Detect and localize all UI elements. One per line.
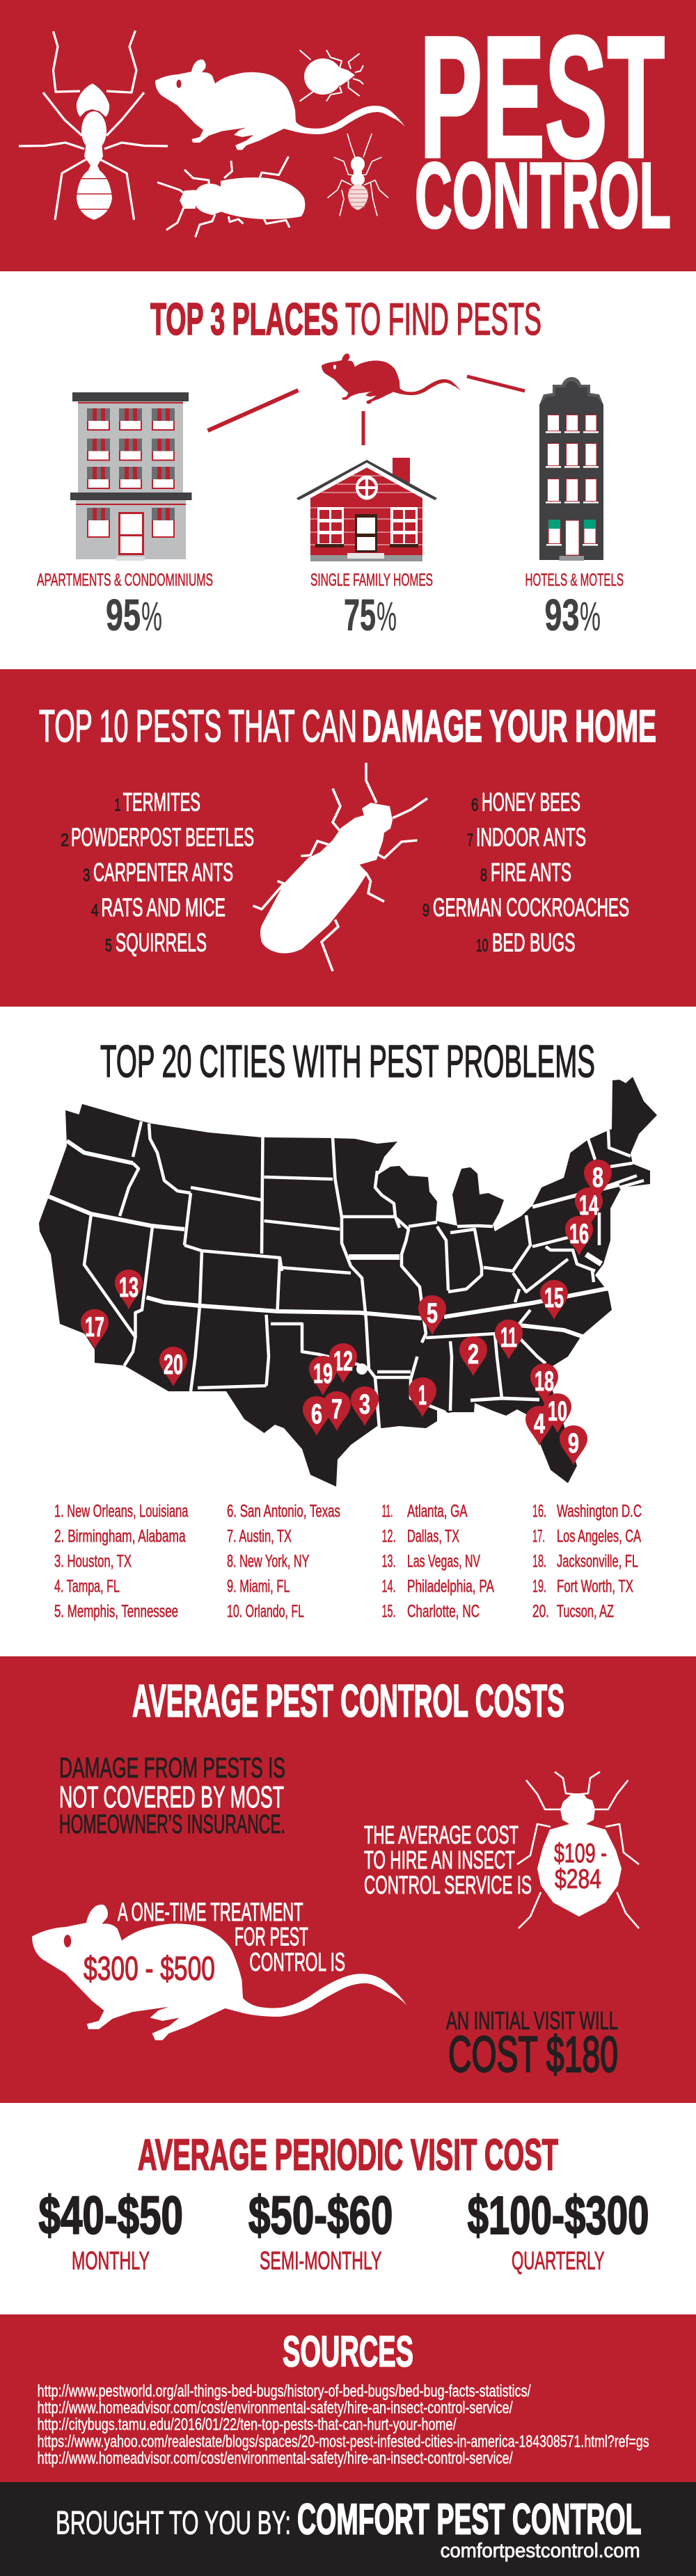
heading: top 3 places to find pests: TOP 3 PLACES	[150, 294, 338, 344]
callout: one-time treatment text: CONTROL IS	[249, 1948, 345, 1976]
list: pests 6 to 10: HONEY BEES	[482, 787, 580, 817]
city list: 9. Miami, FL	[227, 1577, 290, 1597]
city list: 14.	[381, 1577, 395, 1597]
list: pests 1 to 5: 4	[91, 901, 99, 920]
list: pests 6 to 10: 8	[480, 865, 487, 885]
list: pests 1 to 5: TERMITES	[123, 787, 200, 817]
pin 6	[303, 1396, 331, 1436]
city list: 10. Orlando, FL	[227, 1602, 304, 1622]
callout: average cost text	[364, 1821, 532, 1899]
stat: hotels and motels	[525, 570, 624, 640]
source links: http://www.pestworld.org/all-things-bed-bugs/history-of-bed-bugs/bed-bug-facts-statistics/	[38, 2382, 531, 2401]
callout: average cost text: THE AVERAGE COST	[364, 1821, 519, 1849]
panel: top 3 places	[37, 294, 624, 640]
stat: hotels and motels: %	[580, 594, 601, 639]
city list: 12.	[381, 1527, 395, 1546]
pin 9	[560, 1425, 587, 1465]
pin 13: 13	[119, 1272, 139, 1303]
source links: http://www.homeadvisor.com/cost/environmental-safety/hire-an-insect-control-service/	[38, 2449, 513, 2468]
text block: insurance note: HOMEOWNER’S INSURANCE.	[59, 1809, 285, 1839]
callout: bed bug price	[554, 1839, 607, 1894]
footer credit: BROUGHT TO YOU BY:	[56, 2504, 291, 2541]
stat: apartments: APARTMENTS & CONDOMINIUMS	[37, 570, 213, 590]
stat: semi-monthly: SEMI-MONTHLY	[260, 2246, 381, 2275]
pin 5: 5	[427, 1298, 438, 1329]
list: pests 1 to 5: 2	[61, 831, 69, 850]
city list: Dallas, TX	[407, 1527, 459, 1546]
list: pests 1 to 5	[61, 787, 254, 957]
city list: 15.	[381, 1602, 395, 1622]
callout: one-time treatment text: A ONE-TIME TREATMENT	[118, 1898, 303, 1926]
callout: average cost text: CONTROL SERVICE IS	[364, 1871, 532, 1899]
list: pests 1 to 5: 3	[83, 865, 90, 885]
stat: semi-monthly	[248, 2186, 393, 2275]
panel: top 10 pests	[0, 669, 696, 1007]
pin 11	[495, 1320, 523, 1359]
pin 4: 4	[534, 1409, 546, 1439]
footer website: comfortpestcontrol.com	[441, 2540, 640, 2562]
stat: apartments	[37, 570, 213, 640]
icon: bed bug silhouette	[517, 1772, 639, 1928]
footer credit	[56, 2496, 642, 2543]
city list: 17.	[532, 1527, 545, 1546]
pin 16	[565, 1216, 593, 1256]
icon: beetle	[157, 157, 305, 237]
city list: 3. Houston, TX	[54, 1552, 132, 1571]
pin 8	[584, 1160, 612, 1199]
icon: mouse	[155, 60, 405, 150]
map: united states	[39, 1077, 657, 1487]
pin 12	[329, 1343, 357, 1383]
city list: 16.	[532, 1502, 546, 1521]
map pins	[81, 1160, 612, 1465]
list: pests 1 to 5: CARPENTER ANTS	[93, 858, 233, 886]
icon: ant	[19, 31, 168, 220]
pin 1	[409, 1377, 436, 1417]
panel: average pest control costs	[0, 1656, 696, 2103]
city list: Tucson, AZ	[557, 1602, 614, 1622]
source links: http://www.homeadvisor.com/cost/environmental-safety/hire-an-insect-control-service/	[38, 2399, 513, 2417]
pin 2	[459, 1336, 487, 1376]
list: pests 6 to 10: INDOOR ANTS	[476, 823, 586, 851]
pin 12: 12	[333, 1346, 353, 1377]
pin 11: 11	[500, 1322, 517, 1353]
stat: single family homes: %	[377, 594, 397, 639]
pin 19	[309, 1356, 337, 1395]
list: pests 6 to 10	[422, 787, 629, 957]
stat: hotels and motels: 93	[544, 590, 579, 640]
city list: Jacksonville, FL	[557, 1552, 638, 1571]
list: pests 1 to 5: 1	[114, 796, 121, 815]
list: pests 6 to 10: 10	[476, 936, 489, 956]
city list: Atlanta, GA	[407, 1502, 468, 1521]
pin 15	[540, 1280, 568, 1320]
icon: hotel	[539, 377, 603, 561]
pin 20	[159, 1347, 187, 1386]
panel: header	[0, 0, 696, 271]
pin 5	[418, 1295, 446, 1335]
source links	[38, 2382, 649, 2468]
pin 9: 9	[568, 1428, 579, 1459]
pin 10	[544, 1393, 571, 1433]
panel: average periodic visit cost	[39, 2131, 649, 2275]
pin 14: 14	[579, 1190, 599, 1221]
city list: Las Vegas, NV	[407, 1552, 480, 1571]
stat: semi-monthly: $50-$60	[248, 2186, 393, 2246]
city list	[54, 1502, 642, 1622]
panel: footer	[0, 2482, 696, 2576]
list: pests 1 to 5: SQUIRRELS	[116, 928, 207, 957]
pin 19: 19	[313, 1359, 333, 1389]
pin 15: 15	[544, 1283, 564, 1313]
list: pests 6 to 10: 9	[422, 901, 429, 920]
heading: top 3 places to find pests: TO FIND PESTS	[345, 294, 541, 344]
pin 7	[323, 1391, 351, 1431]
stat: monthly: $40-$50	[39, 2186, 183, 2246]
pin 17: 17	[85, 1312, 104, 1343]
stat: hotels and motels: HOTELS & MOTELS	[525, 570, 624, 590]
city list: 8. New York, NY	[227, 1552, 310, 1571]
pin 3	[351, 1386, 379, 1426]
pin 17	[81, 1309, 109, 1349]
callout: bed bug price: $284	[555, 1864, 601, 1894]
city list: 6. San Antonio, Texas	[227, 1502, 340, 1521]
city list: Fort Worth, TX	[557, 1577, 633, 1597]
pin 13	[115, 1270, 143, 1309]
source links: http://citybugs.tamu.edu/2016/01/22/ten-top-pests-that-can-hurt-your-home/	[38, 2415, 457, 2434]
pin 4	[525, 1406, 553, 1446]
city list: 11.	[381, 1502, 393, 1521]
pin 2: 2	[468, 1339, 479, 1370]
icon: bed bug	[299, 50, 363, 102]
pin 10: 10	[548, 1396, 567, 1427]
city list: 7. Austin, TX	[227, 1527, 292, 1546]
stat: single family homes: SINGLE FAMILY HOMES	[310, 570, 433, 590]
stat: monthly	[39, 2186, 183, 2275]
heading: sources: SOURCES	[283, 2328, 413, 2376]
city list: 1. New Orleans, Louisiana	[54, 1502, 188, 1521]
list: pests 1 to 5: POWDERPOST BEETLES	[71, 823, 254, 851]
city list: 19.	[532, 1577, 546, 1597]
stat: apartments: %	[141, 594, 162, 639]
stat: quarterly	[468, 2186, 649, 2275]
city list: Philadelphia, PA	[407, 1577, 494, 1597]
list: pests 1 to 5: 5	[105, 936, 112, 956]
callout: bed bug price: $109 -	[554, 1839, 607, 1869]
city list: Washington D.C	[557, 1502, 642, 1521]
city list: Charlotte, NC	[407, 1602, 480, 1622]
callout: one-time treatment text	[118, 1898, 345, 1976]
pin 14	[575, 1187, 603, 1227]
pin 7: 7	[331, 1394, 342, 1425]
callout: initial visit	[446, 2006, 618, 2083]
pin 3: 3	[359, 1389, 370, 1420]
text block: insurance note: DAMAGE FROM PESTS IS	[59, 1752, 285, 1784]
list: pests 6 to 10: 6	[471, 796, 479, 815]
pin 6: 6	[311, 1399, 322, 1430]
pin 1: 1	[418, 1380, 427, 1411]
text block: insurance note: NOT COVERED BY MOST	[59, 1781, 284, 1814]
panel: sources	[0, 2314, 696, 2483]
icon: termite silhouette	[253, 762, 427, 971]
list: pests 6 to 10: BED BUGS	[492, 928, 575, 957]
pin 20: 20	[164, 1350, 183, 1380]
heading: top 10 pests: TOP 10 PESTS THAT CAN	[39, 701, 357, 751]
icon: mouse silhouette	[32, 1905, 406, 2040]
list: pests 6 to 10: FIRE ANTS	[491, 858, 571, 886]
list: pests 6 to 10: 7	[467, 831, 473, 850]
stat: apartments: 95	[106, 590, 141, 640]
icon: apartment building	[70, 392, 192, 561]
city list: 20.	[532, 1602, 549, 1622]
panel: top 20 cities	[39, 1036, 657, 1622]
city list: 2. Birmingham, Alabama	[54, 1527, 186, 1546]
stat: monthly: MONTHLY	[72, 2246, 150, 2275]
icon: termite	[328, 134, 388, 216]
pin 18: 18	[535, 1366, 554, 1397]
text block: insurance note	[59, 1752, 285, 1839]
callout: one-time treatment text: FOR PEST	[235, 1923, 308, 1951]
icon: house	[296, 458, 437, 561]
city list: 18.	[532, 1552, 546, 1571]
connector lines	[207, 376, 525, 445]
stat: quarterly: QUARTERLY	[512, 2246, 605, 2275]
city list: 13.	[381, 1552, 395, 1571]
city list: Los Angeles, CA	[557, 1527, 641, 1546]
icon: red mouse	[322, 353, 461, 404]
city list: 4. Tampa, FL	[54, 1577, 120, 1597]
callout: average cost text: TO HIRE AN INSECT	[364, 1846, 515, 1874]
stat: single family homes: 75	[344, 590, 376, 640]
stat: single family homes	[310, 570, 433, 640]
pin 8: 8	[592, 1162, 603, 1193]
list: pests 1 to 5: RATS AND MICE	[101, 893, 226, 922]
callout: treatment price: $300 - $500	[84, 1951, 215, 1987]
city list: 5. Memphis, Tennessee	[54, 1602, 178, 1622]
pin 18	[530, 1363, 558, 1403]
pin 16: 16	[569, 1219, 589, 1249]
